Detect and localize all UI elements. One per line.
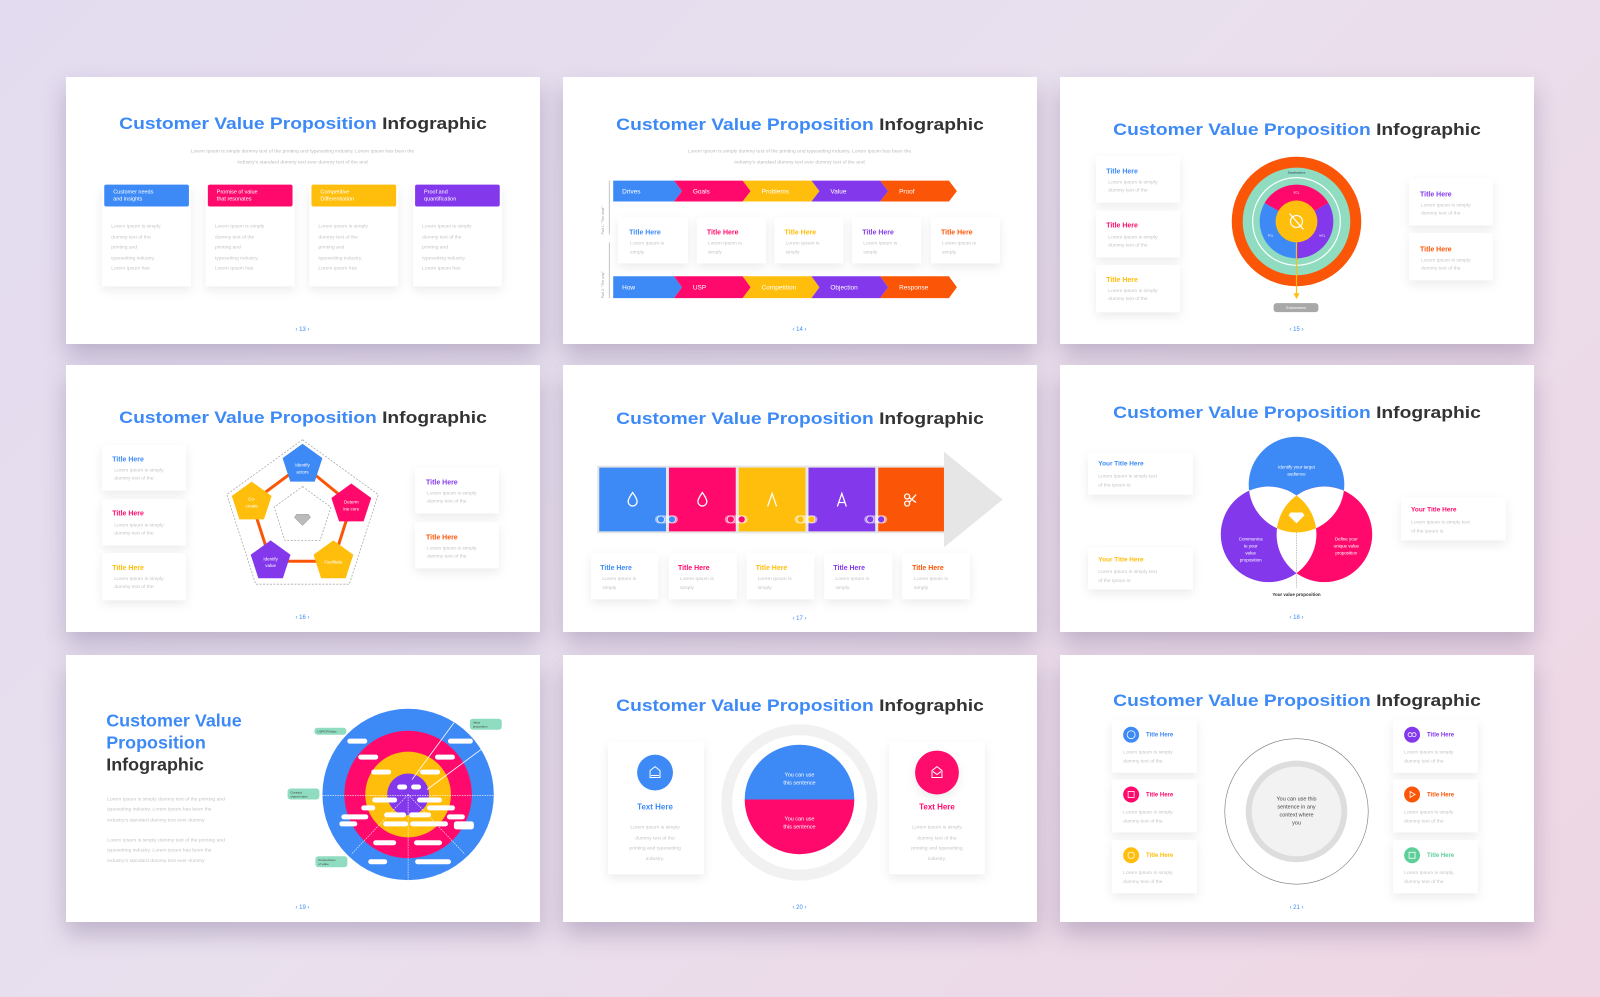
venn: unique value	[1334, 543, 1359, 548]
right card: printing and typesetting	[911, 845, 963, 851]
cards: Lorem Ipsum is	[786, 240, 820, 246]
right cards: dummy text of the	[1404, 759, 1444, 765]
target: Perspectives	[318, 858, 336, 862]
column cards	[102, 185, 502, 286]
top chevrons: Value	[830, 189, 847, 196]
title: Customer Value Proposition Infographic	[1113, 403, 1481, 422]
column cards: Lorem Ipsum has	[318, 265, 357, 271]
right cards: Lorem Ipsum is simply	[1404, 809, 1454, 815]
top chevrons: Goals	[693, 189, 710, 196]
cards: simply	[942, 249, 957, 255]
column cards: Lorem Ipsum has	[215, 265, 254, 271]
venn: te your	[1244, 543, 1258, 548]
right cards: dummy text of the	[1421, 265, 1461, 271]
title	[106, 711, 242, 775]
body text: industry's standard dummy text ever dummy	[107, 858, 205, 864]
page number: ‹ 15 ›	[1290, 327, 1303, 333]
subtitle: Lorem Ipsum is simply dummy text of the printing and typesetting industry. Lorem Ipsum has been the	[688, 149, 911, 155]
central circle: context where	[1279, 812, 1314, 818]
left cards: dummy text of the	[114, 584, 154, 590]
left cards: Title Here	[112, 457, 144, 464]
body text	[107, 796, 225, 864]
right cards: dummy text of the	[427, 498, 467, 504]
bottom chevrons: Competition	[762, 285, 797, 292]
slide 16: pentagon cycle	[66, 365, 540, 632]
circle diagram: FOL	[1268, 233, 1274, 237]
left cards: dummy text of the	[114, 530, 154, 536]
target: Creating	[291, 790, 302, 794]
left card: Text Here	[637, 802, 673, 811]
column cards: dummy text of the	[422, 234, 462, 240]
bottom chevrons: USP	[693, 285, 706, 292]
right cards: Lorem Ipsum is simply	[1421, 257, 1471, 263]
slide 14: chevron rows: Part 1: "The what"	[601, 206, 605, 234]
title: Customer Value Proposition Infographic	[1113, 120, 1481, 139]
bottom chevrons: How	[622, 285, 635, 292]
title: Customer Value Proposition Infographic	[616, 696, 984, 715]
right cards: Lorem Ipsum is simply	[1404, 870, 1454, 876]
left cards: Title Here	[1106, 222, 1138, 229]
left cards: Title Here	[1146, 792, 1174, 798]
left cards: dummy text of the	[1123, 759, 1163, 765]
circle diagram	[1232, 157, 1361, 312]
icon: diamond	[295, 514, 310, 525]
bottom chevrons: Objection	[830, 285, 858, 292]
slide 14: chevron rows	[563, 77, 1037, 344]
left cards: Your Title Here	[1098, 461, 1144, 468]
title: Customer Value Proposition Infographic	[616, 115, 984, 134]
title: Proposition	[106, 733, 206, 753]
title: Customer Value Proposition Infographic	[119, 408, 487, 427]
cards: Title Here	[678, 565, 710, 572]
right card: industry.	[928, 856, 946, 862]
column cards: Lorem Ipsum is simply	[318, 223, 368, 229]
pentagon diagram: create	[245, 503, 258, 508]
right cards	[1393, 720, 1478, 893]
column cards: Differentiation	[320, 197, 354, 203]
cards: Lorem Ipsum is	[863, 240, 898, 246]
cards: Title Here	[912, 565, 944, 572]
right cards: dummy text of the	[1404, 818, 1444, 824]
cards: Lorem Ipsum is	[602, 576, 637, 582]
slide 18: venn diagram	[1060, 365, 1534, 632]
left cards: Title Here	[112, 510, 144, 517]
page number: ‹ 16 ›	[296, 615, 309, 621]
left cards: Title Here	[1106, 169, 1138, 176]
title: Customer Value Proposition Infographic	[1113, 691, 1481, 710]
left cards: of the Ipsum is	[1098, 578, 1131, 584]
subtitle	[191, 149, 414, 166]
cards: Title Here	[785, 229, 816, 236]
bottom chevrons: Response	[899, 285, 929, 292]
cards: Title Here	[862, 229, 894, 236]
left cards: Lorem Ipsum is simply	[1123, 809, 1173, 815]
central circle: sentence in any	[1277, 804, 1316, 810]
left cards	[102, 445, 186, 600]
column cards: quantification	[424, 197, 456, 203]
venn: value	[1245, 550, 1257, 555]
cards: simply	[835, 585, 850, 591]
page number: ‹ 20 ›	[793, 905, 806, 911]
title: Customer Value Proposition Infographic	[119, 114, 487, 133]
cards: simply	[630, 249, 645, 255]
right card: Lorem Ipsum is simply text	[1411, 519, 1471, 525]
cards: Lorem Ipsum is	[708, 240, 742, 246]
central circle	[1225, 739, 1368, 884]
column cards: Lorem Ipsum is simply	[422, 223, 472, 229]
split circle	[727, 730, 872, 875]
arrow	[597, 452, 1003, 547]
cards: Lorem Ipsum is	[914, 576, 949, 582]
venn: Communica	[1239, 536, 1263, 541]
left cards: dummy text of the	[1108, 296, 1148, 302]
body text: industry's standard dummy text ever dummy	[107, 817, 205, 823]
column cards: Competitive	[320, 190, 349, 196]
column cards: that resonates	[217, 197, 252, 203]
column cards: printing and	[215, 244, 241, 250]
cards: Lorem Ipsum is	[942, 240, 976, 246]
venn	[1221, 437, 1372, 597]
left cards: Lorem Ipsum is simply	[1108, 288, 1158, 294]
left cards: Lorem Ipsum is simply	[114, 576, 164, 582]
slide 17: arrow blocks	[563, 365, 1037, 632]
left cards	[1096, 156, 1180, 312]
cards: Title Here	[941, 229, 973, 236]
left cards: dummy text of the	[1108, 242, 1148, 248]
page number: ‹ 13 ›	[296, 327, 309, 333]
left cards: Lorem Ipsum is simply	[1108, 180, 1158, 186]
right cards: Lorem Ipsum is simply	[427, 545, 477, 551]
right card: Text Here	[919, 802, 955, 811]
cards	[591, 553, 970, 599]
left cards: dummy text of the	[1123, 879, 1163, 885]
central circle: You can use this	[1277, 796, 1317, 802]
left cards: Title Here	[1146, 853, 1174, 859]
left cards: Lorem Ipsum is simply text	[1098, 569, 1158, 575]
left cards: Lorem Ipsum is simply	[114, 468, 164, 474]
cards: Title Here	[756, 565, 787, 572]
venn: Your value proposition	[1272, 592, 1321, 597]
cards: Title Here	[707, 229, 739, 236]
column cards: dummy text of the	[318, 234, 358, 240]
pentagon diagram: Facilitate	[324, 559, 343, 564]
venn: Define your	[1335, 536, 1358, 541]
circle diagram: MCL	[1319, 233, 1326, 237]
right card	[1401, 498, 1506, 540]
subtitle: industry's standard dummy text ever dummy text of the and	[734, 160, 865, 166]
left cards: dummy text of the	[1123, 818, 1163, 824]
target: Value	[473, 721, 481, 725]
venn: Identify your target	[1278, 465, 1316, 470]
right cards: dummy text of the	[1421, 210, 1461, 216]
target: proposition	[473, 725, 488, 729]
target: USP/CP/Value	[317, 730, 337, 734]
column cards: Promise of value	[217, 190, 258, 196]
right cards: dummy text of the	[1404, 879, 1444, 885]
pentagon diagram: actors	[296, 470, 309, 475]
slide 20: split circle	[563, 655, 1037, 922]
left cards: dummy text of the	[114, 476, 154, 482]
right cards: Title Here	[1427, 792, 1455, 798]
bracket labels	[608, 181, 610, 298]
column cards: typesetting industry.	[318, 255, 362, 261]
slide 14: chevron rows: Part 2: "The why"	[601, 271, 605, 298]
top chevrons: Problems	[762, 189, 789, 196]
right card: Lorem Ipsum is simply	[912, 824, 962, 830]
right card: Your Title Here	[1411, 506, 1457, 513]
left cards: Title Here	[112, 565, 144, 572]
split circle: You can use	[785, 773, 814, 779]
pentagon diagram	[227, 440, 378, 584]
icon: crossed circle	[1290, 213, 1303, 229]
slide 13: four column cards	[66, 77, 540, 344]
body text: typesetting industry. Lorem Ipsum has been the	[107, 806, 212, 812]
bottom chevrons	[613, 276, 957, 298]
column cards: printing and	[318, 244, 345, 250]
right cards: Title Here	[1420, 192, 1452, 199]
pentagon diagram: Identify	[295, 463, 310, 468]
left cards: Your Title Here	[1098, 556, 1144, 563]
cards: Title Here	[600, 565, 632, 572]
right card: dummy text of the	[917, 835, 957, 841]
title: Infographic	[106, 755, 204, 775]
right card: of the Ipsum is	[1411, 528, 1444, 534]
left cards: dummy text of the	[1108, 188, 1148, 194]
column cards: typesetting industry.	[422, 255, 466, 261]
left cards: Title Here	[1146, 733, 1174, 739]
pentagon diagram: ine core	[343, 506, 360, 511]
body text: typesetting industry. Lorem Ipsum has been the	[107, 847, 212, 853]
column cards: printing and	[111, 244, 137, 250]
split circle: this sentence	[783, 781, 816, 787]
column cards: typesetting industry.	[111, 255, 155, 261]
circle diagram: ECL	[1294, 191, 1300, 195]
cards: Lorem Ipsum is	[630, 240, 665, 246]
title: Customer Value	[106, 711, 242, 731]
pentagon diagram: value	[265, 563, 276, 568]
top chevrons	[613, 181, 957, 202]
subtitle	[688, 149, 911, 166]
right card	[889, 742, 985, 874]
cards: simply	[863, 249, 878, 255]
left card: dummy text of the	[635, 835, 675, 841]
column cards: Lorem Ipsum has	[422, 265, 461, 271]
subtitle: industry's standard dummy text ever dummy text of the and	[237, 160, 368, 166]
right cards: Title Here	[1427, 733, 1455, 739]
left card	[608, 742, 704, 874]
pentagon diagram: Determ	[344, 499, 359, 504]
right cards: Lorem Ipsum is simply	[427, 491, 477, 497]
left cards: Lorem Ipsum is simply	[1123, 870, 1173, 876]
icons	[628, 493, 916, 506]
title: Customer Value Proposition Infographic	[616, 409, 984, 428]
left cards: Lorem Ipsum is simply	[1123, 750, 1173, 756]
column cards: Proof and	[424, 190, 448, 196]
left cards: Title Here	[1106, 277, 1138, 284]
right cards: Lorem Ipsum is simply	[1404, 750, 1454, 756]
venn: proposition	[1240, 557, 1262, 562]
left card: Lorem Ipsum is simply	[630, 824, 680, 830]
cards: Lorem Ipsum is	[835, 576, 870, 582]
right cards	[1409, 179, 1493, 280]
cards: Title Here	[629, 229, 661, 236]
cards: simply	[786, 249, 800, 255]
cards: Lorem Ipsum is	[680, 576, 714, 582]
page number: ‹ 14 ›	[793, 327, 806, 333]
pentagon diagram: Co-	[248, 496, 256, 501]
target: shared value	[291, 794, 308, 798]
right cards: Lorem Ipsum is simply	[1421, 203, 1471, 209]
left cards: Lorem Ipsum is simply text	[1098, 474, 1158, 480]
split circle: this sentence	[783, 824, 816, 830]
cards: simply	[914, 585, 929, 591]
circle diagram: Supplications	[1288, 171, 1306, 175]
left cards	[1088, 453, 1193, 589]
venn: proposition	[1335, 550, 1358, 555]
circle diagram: Environment	[1286, 306, 1306, 310]
body text: Lorem Ipsum is simply dummy text of the printing and	[107, 837, 225, 843]
slide 15: concentric circle	[1060, 77, 1534, 344]
left card: industry.	[646, 856, 664, 862]
right cards	[415, 468, 499, 568]
cards: simply	[708, 249, 722, 255]
target	[288, 709, 502, 880]
step pills	[655, 515, 887, 523]
icon: diamond	[1289, 512, 1304, 523]
left card: printing and typesetting	[629, 845, 681, 851]
left cards	[1112, 720, 1197, 893]
cards	[618, 217, 1000, 263]
top chevrons: Proof	[899, 189, 915, 196]
column cards: printing and	[422, 244, 448, 250]
right cards: dummy text of the	[427, 553, 467, 559]
column cards: and insights	[113, 197, 143, 203]
body text: Lorem Ipsum is simply dummy text of the printing and	[107, 796, 225, 802]
right cards: Title Here	[426, 534, 458, 541]
page number: ‹ 17 ›	[793, 616, 806, 622]
pentagon diagram: Identify	[263, 556, 279, 561]
column cards: Customer needs	[113, 190, 154, 196]
target: of value	[318, 862, 329, 866]
central circle: you	[1292, 820, 1301, 826]
cards: simply	[680, 585, 695, 591]
page number: ‹ 19 ›	[296, 905, 309, 911]
column cards: typesetting industry.	[215, 255, 259, 261]
column cards: dummy text of the	[215, 234, 255, 240]
column cards: Lorem Ipsum has	[111, 265, 150, 271]
right cards: Title Here	[1427, 853, 1455, 859]
cards: simply	[758, 585, 772, 591]
cards: Title Here	[833, 565, 865, 572]
column cards: Lorem Ipsum is simply	[111, 223, 161, 229]
cards: simply	[602, 585, 617, 591]
cards: Lorem Ipsum is	[758, 576, 792, 582]
page number: ‹ 18 ›	[1290, 615, 1303, 621]
top chevrons: Drives	[622, 189, 641, 196]
column cards: Lorem Ipsum is simply	[215, 223, 265, 229]
split circle: You can use	[785, 816, 814, 822]
left cards: Lorem Ipsum is simply	[1108, 234, 1158, 240]
slide 21: central circle with six cards	[1060, 655, 1534, 922]
right cards: Title Here	[1420, 246, 1452, 253]
subtitle: Lorem Ipsum is simply dummy text of the printing and typesetting industry. Lorem Ipsum has been the	[191, 149, 414, 155]
left cards: of the Ipsum is	[1098, 483, 1131, 489]
page number: ‹ 21 ›	[1290, 905, 1303, 911]
slide 19: target diagram	[66, 655, 540, 922]
venn: audience	[1287, 472, 1306, 477]
column cards: dummy text of the	[111, 234, 151, 240]
right cards: Title Here	[426, 480, 458, 487]
left cards: Lorem Ipsum is simply	[114, 522, 164, 528]
